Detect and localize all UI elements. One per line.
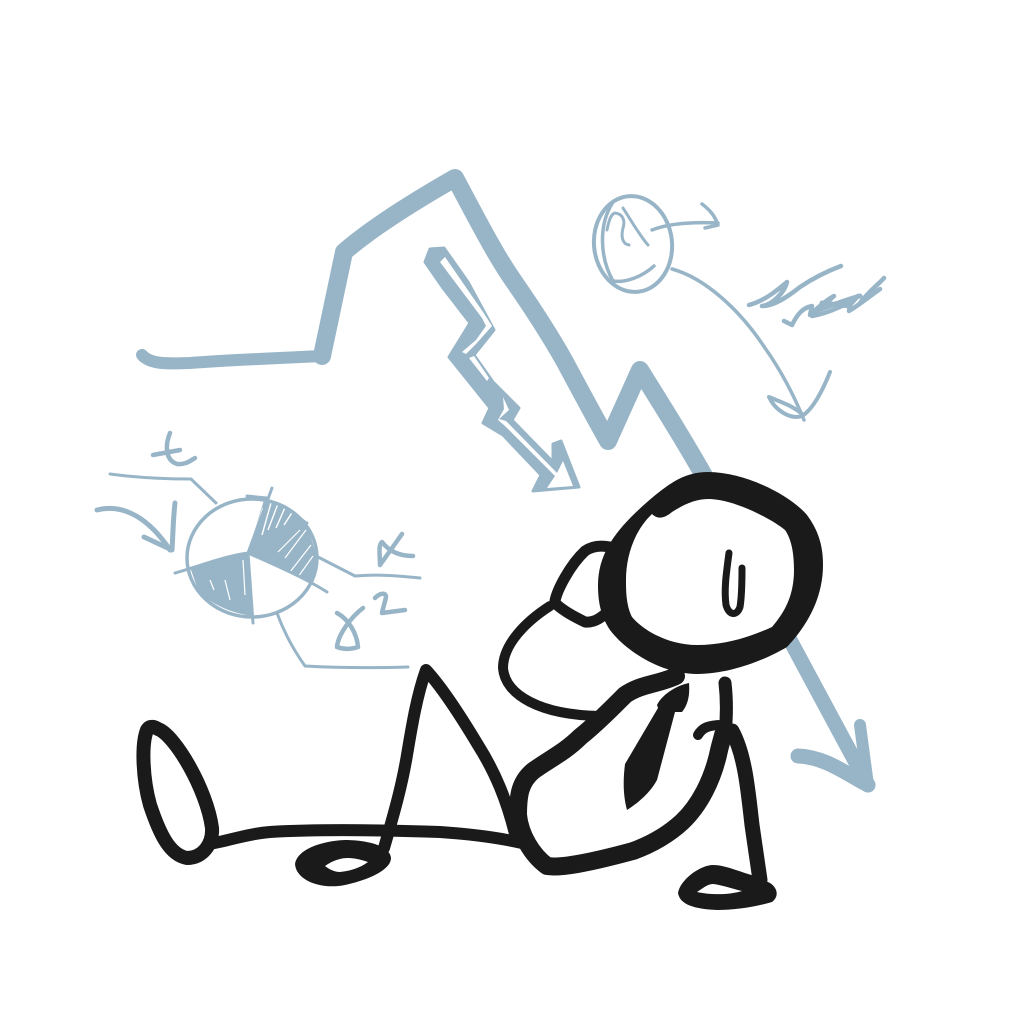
left foot (143, 727, 212, 858)
big falling trend line with arrow (142, 178, 868, 785)
arm raised behind head (503, 606, 600, 716)
clock sketch with arrows (589, 192, 884, 420)
necktie (624, 683, 689, 810)
bent leg (384, 670, 516, 848)
small zigzag arrow (425, 248, 579, 491)
straight leg on ground (208, 830, 522, 844)
hand behind head (555, 546, 610, 622)
eye (725, 553, 742, 614)
pie chart sketch (97, 433, 420, 668)
middle foot (295, 840, 391, 886)
torso outline (518, 676, 726, 866)
head (598, 472, 823, 674)
right leg and foot (678, 731, 777, 910)
